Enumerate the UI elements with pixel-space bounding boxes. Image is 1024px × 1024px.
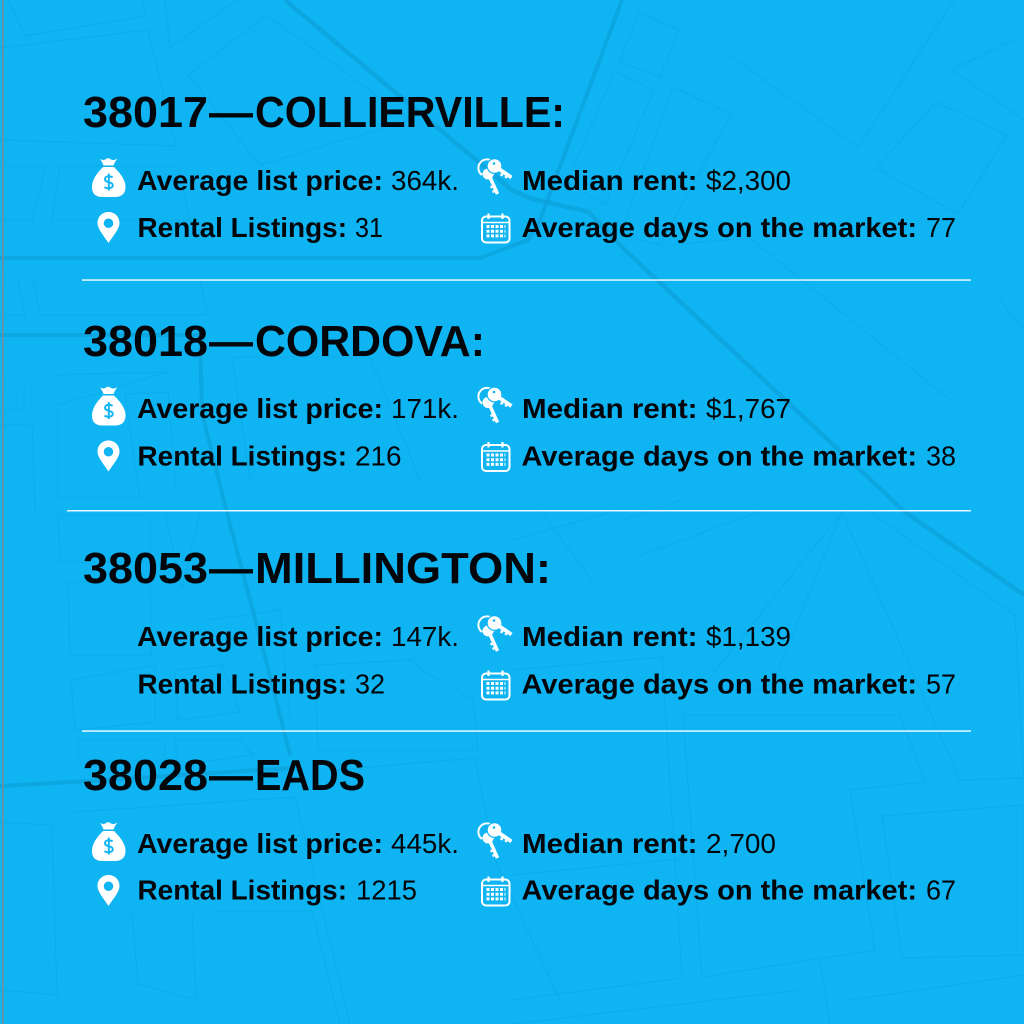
text: average list price: Average list price: xyxy=(137,165,383,196)
icon: money bag xyxy=(92,158,126,197)
icon: map pin xyxy=(98,440,120,472)
heading: 38028: — xyxy=(209,752,254,800)
heading: 38017: 38017 xyxy=(83,89,208,137)
heading: 38018: 38018 xyxy=(83,318,208,366)
value: rent: $1,139 xyxy=(706,621,791,652)
value: listings: 1215 xyxy=(356,874,417,906)
value: listings: 31 xyxy=(355,212,383,243)
heading: 38018: CORDOVA: xyxy=(255,318,485,366)
text: median rent: Median rent: xyxy=(522,165,698,196)
value: list price: 445k. xyxy=(391,828,459,859)
text: median rent: Median rent: xyxy=(522,393,698,424)
section: 38017 Collierville xyxy=(83,89,956,243)
icon: calendar xyxy=(482,442,510,471)
value: days: 57 xyxy=(926,668,956,700)
text: average list price: Average list price: xyxy=(137,828,383,859)
text: average days on the market: Average days on the market: xyxy=(522,212,917,243)
icon: calendar xyxy=(482,214,510,242)
value: list price: 147k. xyxy=(391,621,459,652)
value: listings: 32 xyxy=(355,668,385,700)
heading: 38028: EADS xyxy=(255,752,365,800)
value: days: 67 xyxy=(926,874,956,906)
icon: calendar xyxy=(482,670,510,700)
section: 38028 Eads xyxy=(83,752,956,906)
value: days: 77 xyxy=(926,212,956,243)
icon: map pin xyxy=(98,875,120,906)
icon: calendar xyxy=(482,876,510,906)
heading: 38053: 38053 xyxy=(83,545,208,593)
heading: 38017: — xyxy=(209,89,254,137)
text: rental listings: Rental Listings: xyxy=(138,668,347,700)
value: list price: 171k. xyxy=(391,393,459,424)
text: rental listings: Rental Listings: xyxy=(138,440,347,472)
heading: 38028: 38028 xyxy=(83,752,208,800)
heading: 38018: — xyxy=(209,318,254,366)
icon: keys xyxy=(478,158,512,194)
icon: keys xyxy=(478,386,512,422)
value: rent: $1,767 xyxy=(706,393,791,424)
icon: keys xyxy=(478,615,512,651)
text: average days on the market: Average days on the market: xyxy=(522,874,917,906)
section: 38018 Cordova xyxy=(83,318,956,472)
text: rental listings: Rental Listings: xyxy=(138,874,347,906)
icon: map pin xyxy=(98,212,120,243)
text: rental listings: Rental Listings: xyxy=(138,212,347,243)
icon: money bag xyxy=(92,822,126,861)
heading: 38053: MILLINGTON: xyxy=(255,545,551,593)
text: average list price: Average list price: xyxy=(137,393,383,424)
text: median rent: Median rent: xyxy=(522,621,698,652)
value: days: 38 xyxy=(926,440,956,472)
text: average days on the market: Average days on the market: xyxy=(522,668,917,700)
section: 38053 Millington xyxy=(83,545,956,700)
value: list price: 364k. xyxy=(391,165,459,196)
text: average days on the market: Average days on the market: xyxy=(522,440,917,472)
text: average list price: Average list price: xyxy=(137,621,383,652)
value: listings: 216 xyxy=(355,440,402,472)
value: rent: 2,700 xyxy=(706,828,776,859)
heading: 38017: COLLIERVILLE: xyxy=(255,89,565,137)
icon: money bag xyxy=(92,387,126,426)
value: rent: $2,300 xyxy=(706,165,791,196)
text: median rent: Median rent: xyxy=(522,828,698,859)
heading: 38053: — xyxy=(209,545,254,593)
icon: keys xyxy=(478,822,512,858)
